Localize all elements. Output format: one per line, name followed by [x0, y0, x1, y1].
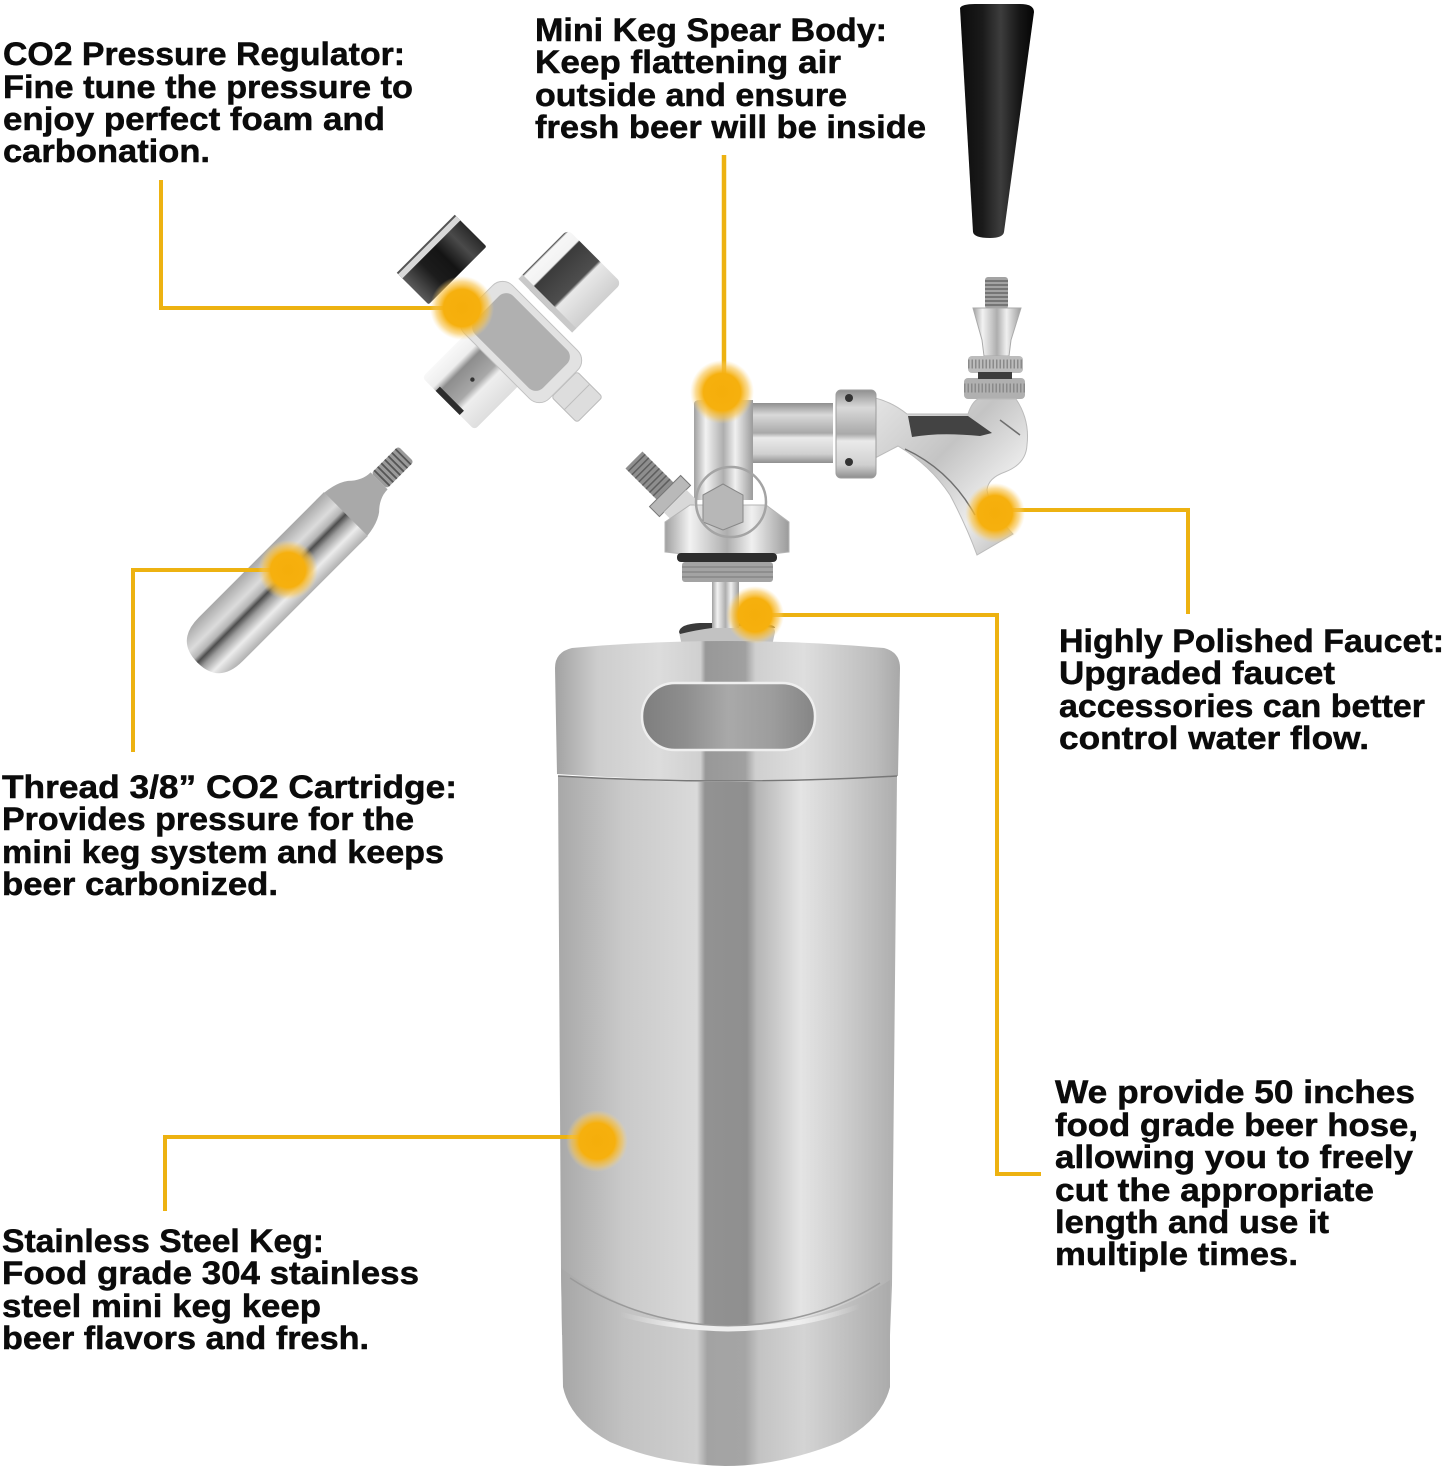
text: mini keg spear body: Keep flattening air	[535, 44, 841, 80]
text: thread CO2 cartridge: Provides pressure for the	[2, 801, 414, 837]
callout: spear leader	[690, 155, 754, 424]
icon: black tap handle	[960, 4, 1034, 238]
text: highly polished faucet	[1059, 623, 1444, 756]
faucet threaded stud	[985, 277, 1008, 309]
text: beer hose: allowing you to freely	[1055, 1139, 1413, 1175]
spear coupler assembly	[618, 400, 789, 628]
keg upper section with handle	[555, 641, 900, 781]
callout: keg leader	[165, 1110, 628, 1211]
keg main body	[558, 776, 897, 1335]
threaded coupler	[682, 562, 773, 582]
regulator gauge	[397, 215, 487, 305]
text: thread CO2 cartridge: Thread 3/8” CO2 Cartridge:	[2, 769, 457, 805]
text: CO2 pressure regulator: Fine tune the pressure to	[3, 69, 413, 105]
regulator nut	[552, 372, 602, 422]
text: mini keg spear body: fresh beer will be inside	[535, 109, 926, 145]
faucet dark reflection	[908, 416, 992, 437]
regulator right cap	[518, 229, 622, 333]
faucet cone collar	[973, 308, 1021, 356]
text: CO2 pressure regulator: enjoy perfect foam and	[3, 101, 385, 137]
faucet knurled nuts	[964, 356, 1025, 399]
text: highly polished faucet: accessories can better	[1059, 688, 1425, 724]
faucet collar	[836, 390, 876, 478]
text: stainless steel keg	[2, 1223, 419, 1356]
text: stainless steel keg: steel mini keg keep	[2, 1288, 321, 1324]
callout: CO2 regulator leader	[161, 180, 494, 340]
side gas bolt	[618, 444, 702, 528]
text: thread CO2 cartridge: mini keg system and keeps	[2, 834, 444, 870]
horizontal faucet shank	[753, 403, 833, 463]
regulator left cap	[422, 332, 520, 430]
text: beer hose	[1055, 1074, 1418, 1272]
keg handle cutout	[642, 683, 815, 750]
black gasket	[677, 553, 777, 562]
hex valve	[703, 484, 743, 530]
spear base	[665, 505, 789, 556]
text: CO2 pressure regulator: carbonation.	[3, 133, 210, 169]
faucet edge highlight	[905, 420, 1020, 515]
CO2 cartridge	[175, 432, 428, 685]
text: beer hose: cut the appropriate	[1055, 1172, 1374, 1208]
cartridge thread	[371, 446, 414, 489]
pull ring	[696, 467, 766, 537]
text: beer hose: multiple times.	[1055, 1236, 1298, 1272]
text: mini keg spear body: outside and ensure	[535, 77, 847, 113]
cartridge cylinder	[175, 492, 368, 685]
text: stainless steel keg: Food grade 304 stainless	[2, 1255, 419, 1291]
stainless steel keg	[555, 623, 900, 1466]
spear tube	[712, 582, 739, 628]
regulator central block	[455, 276, 587, 408]
faucet body and spout	[875, 398, 1028, 555]
text: stainless steel keg: Stainless Steel Keg:	[2, 1223, 324, 1259]
keg bottom section	[561, 1268, 890, 1466]
keg neck ring	[679, 623, 775, 646]
text: highly polished faucet: Highly Polished Faucet:	[1059, 623, 1444, 659]
spear upper body	[694, 400, 753, 500]
CO2 regulator	[397, 215, 622, 430]
callout: hose leader	[726, 586, 1041, 1174]
text: thread CO2 cartridge: beer carbonized.	[2, 866, 278, 902]
cartridge shoulder	[316, 459, 401, 544]
text: mini keg spear body: Mini Keg Spear Body:	[535, 12, 887, 48]
callout: cartridge leader	[133, 540, 318, 752]
text: CO2 pressure regulator: CO2 Pressure Regulator:	[3, 36, 405, 72]
text: beer hose: We provide 50 inches	[1055, 1074, 1415, 1110]
text: thread CO2 cartridge	[2, 769, 457, 902]
text: beer hose: food grade beer hose,	[1055, 1107, 1418, 1143]
text: highly polished faucet: Upgraded faucet	[1059, 655, 1335, 691]
text: stainless steel keg: beer flavors and fresh.	[2, 1320, 369, 1356]
text: mini keg spear body	[535, 12, 926, 145]
keg lower seam	[570, 1278, 880, 1329]
text: CO2 pressure regulator	[3, 36, 413, 169]
text: highly polished faucet: control water flow.	[1059, 720, 1369, 756]
callout: faucet leader	[965, 483, 1188, 614]
faucet assembly	[753, 277, 1028, 555]
text: beer hose: length and use it	[1055, 1204, 1329, 1240]
